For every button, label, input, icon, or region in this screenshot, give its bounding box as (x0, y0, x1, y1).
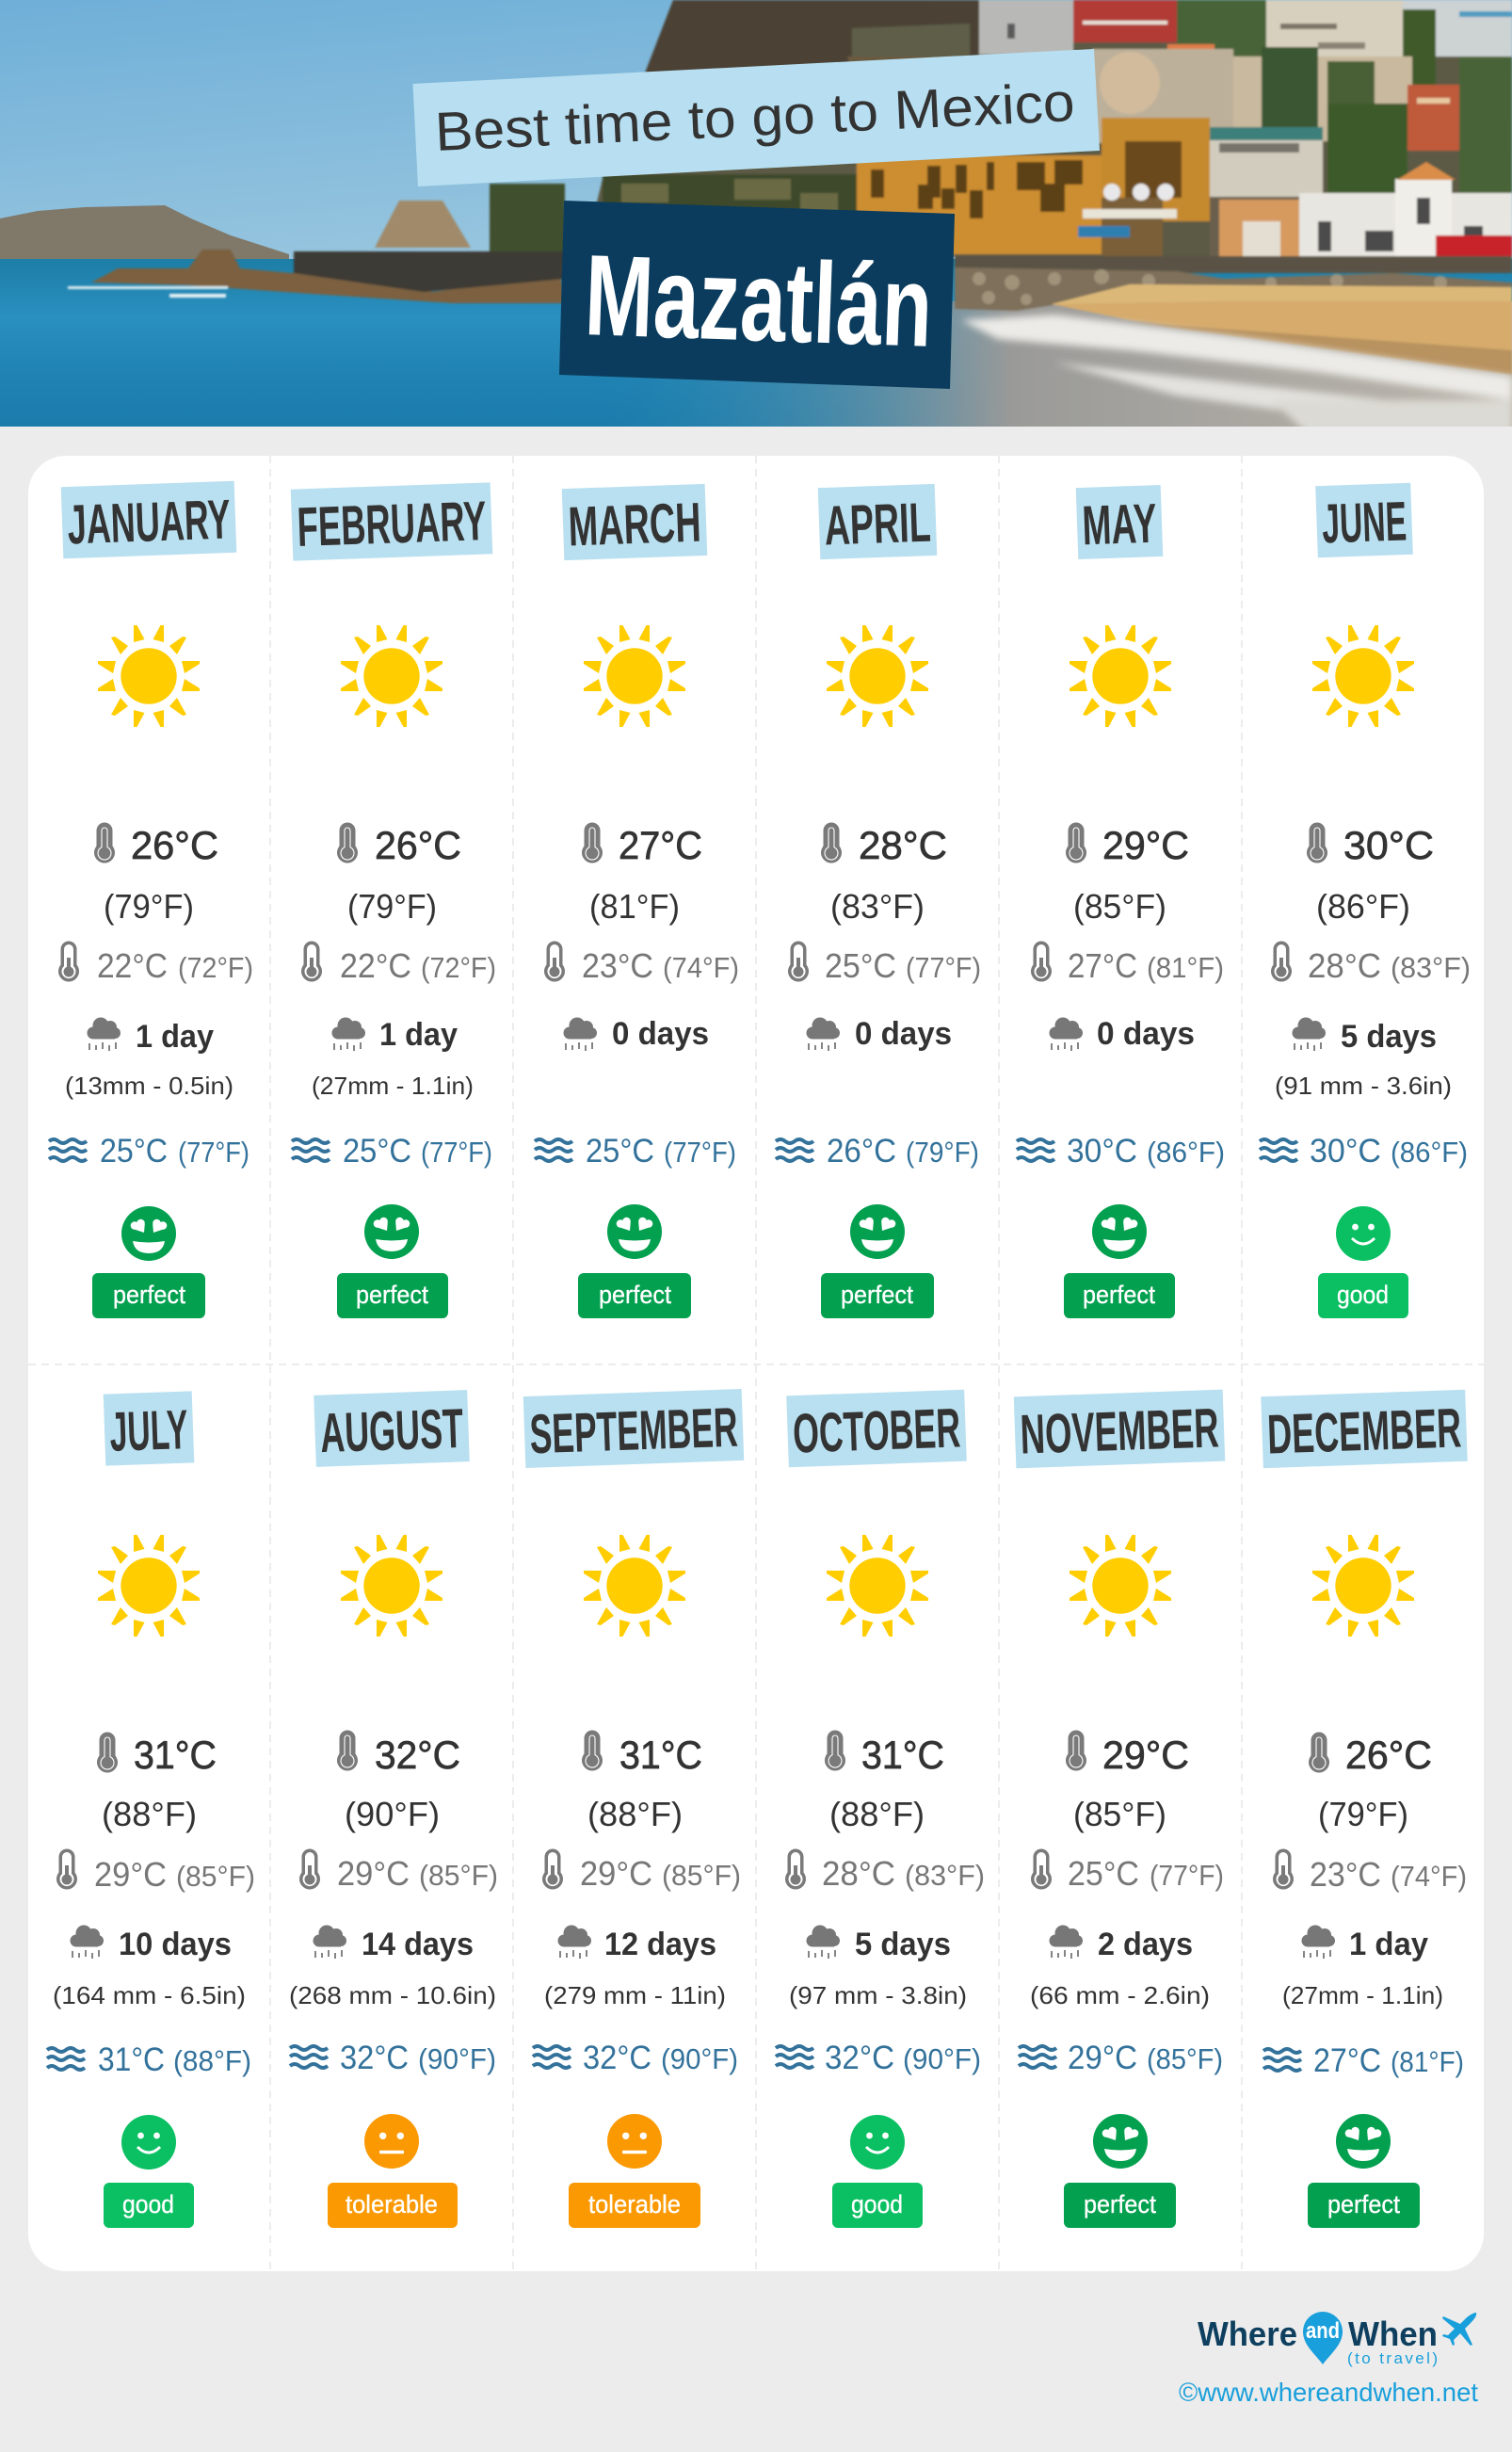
icon: airplane (1442, 2313, 1476, 2346)
sea temperature: (90°F) (418, 2042, 496, 2075)
sea temperature (776, 2040, 981, 2076)
icon: sun (827, 625, 928, 727)
rainfall (806, 1016, 952, 1052)
high temperature (582, 1731, 702, 1833)
low temperature: 28°C (822, 1854, 895, 1893)
low temperature (785, 1849, 985, 1893)
low temperature (1271, 942, 1471, 985)
rating: tolerable (569, 2114, 700, 2228)
icon: sun (1070, 625, 1171, 727)
icon: sun (584, 1535, 685, 1637)
rating: tolerable (328, 2114, 458, 2228)
low temperature (544, 942, 739, 985)
banner subtitle strip: Best time to go to Mexico (434, 72, 1076, 163)
sea temperature: (86°F) (1391, 1136, 1468, 1169)
sea temperature: 29°C (1068, 2040, 1137, 2076)
high temperature: (79°F) (1318, 1795, 1408, 1833)
rainfall: (279 mm - 11in) (544, 1981, 726, 2009)
sea temperature: (90°F) (661, 2042, 738, 2075)
rainfall (1282, 1925, 1443, 2009)
panel: August (289, 1390, 498, 2228)
sea temperature: 26°C (827, 1133, 896, 1170)
high temperature: 26°C (375, 823, 461, 867)
high temperature: 30°C (1343, 823, 1434, 867)
panel: April (776, 484, 981, 1318)
high temperature: 32°C (375, 1733, 460, 1777)
icon: sun (341, 1535, 442, 1637)
low temperature: (83°F) (905, 1859, 985, 1892)
high temperature: (86°F) (1316, 887, 1410, 926)
month heading: FEBRUARY (296, 490, 488, 558)
high temperature: 26°C (131, 823, 218, 867)
low temperature: 29°C (94, 1855, 167, 1894)
sea temperature: 32°C (825, 2040, 894, 2076)
high temperature (97, 1733, 217, 1833)
rating: perfect (337, 1204, 448, 1318)
panel: monthly weather card (28, 456, 1484, 2271)
rating: tolerable: tolerable (588, 2190, 681, 2218)
rainfall (563, 1016, 709, 1052)
rainfall (789, 1925, 967, 2009)
month heading: JULY (108, 1398, 189, 1463)
rating: good (832, 2115, 923, 2228)
high temperature: 29°C (1102, 823, 1189, 867)
rainfall: 1 day (136, 1019, 214, 1055)
low temperature (299, 1849, 498, 1893)
low temperature (58, 942, 253, 985)
sea temperature (533, 2040, 738, 2076)
rainfall: (13mm - 0.5in) (65, 1072, 233, 1100)
sea temperature (1017, 1133, 1225, 1170)
low temperature (1273, 1849, 1467, 1894)
rainfall: 5 days (1341, 1019, 1437, 1055)
sea temperature: (77°F) (178, 1136, 249, 1169)
rainfall (53, 1925, 246, 2009)
low temperature: (77°F) (1150, 1859, 1224, 1892)
rainfall: (91 mm - 3.6in) (1275, 1072, 1452, 1100)
low temperature: (77°F) (906, 951, 981, 984)
sea temperature: 25°C (586, 1133, 654, 1170)
rating: perfect (1064, 2114, 1176, 2228)
sea temperature: 31°C (98, 2041, 165, 2078)
sea temperature (49, 1133, 249, 1170)
panel: November (1014, 1390, 1225, 2228)
high temperature: 28°C (859, 823, 947, 867)
high temperature: 31°C (134, 1733, 217, 1777)
panel: June (1260, 483, 1471, 1318)
month heading (786, 1390, 967, 1467)
month heading (314, 1390, 470, 1467)
low temperature: 28°C (1308, 946, 1381, 985)
high temperature: 31°C (861, 1733, 944, 1777)
rainfall (1030, 1925, 1210, 2009)
icon: map pin (1303, 2312, 1343, 2364)
rainfall: 5 days (855, 1927, 951, 1962)
sea temperature (47, 2041, 251, 2078)
rating: perfect: perfect (113, 1281, 185, 1309)
rainfall (65, 1017, 233, 1100)
panel: December (1261, 1390, 1468, 2228)
low temperature (788, 942, 981, 985)
high temperature: (88°F) (587, 1795, 683, 1833)
icon: sun (827, 1535, 928, 1637)
rating: good: good (122, 2190, 174, 2218)
panel: May (1017, 485, 1225, 1318)
low temperature (542, 1849, 741, 1893)
rating: tolerable: tolerable (346, 2190, 438, 2218)
sea temperature (776, 1133, 979, 1170)
panel: July (47, 1391, 255, 2228)
month heading: JUNE (1321, 490, 1407, 556)
rainfall: 1 day (1349, 1927, 1428, 1962)
low temperature: 27°C (1068, 946, 1137, 985)
sea temperature: 30°C (1310, 1133, 1381, 1170)
month heading (818, 484, 937, 559)
rainfall: 14 days (362, 1927, 474, 1962)
icon: sun (1312, 1535, 1414, 1637)
rainfall (544, 1925, 726, 2009)
banner subtitle strip (412, 49, 1100, 186)
rainfall: 0 days (612, 1016, 709, 1052)
sea temperature: (81°F) (1391, 2045, 1464, 2078)
month heading (1315, 483, 1413, 557)
rating: perfect (1308, 2114, 1420, 2228)
month heading (1014, 1390, 1225, 1468)
icon: sun (341, 625, 442, 727)
low temperature: (85°F) (419, 1859, 498, 1892)
rainfall (1275, 1017, 1452, 1100)
rainfall: (97 mm - 3.8in) (789, 1981, 967, 2009)
rainfall: 12 days (604, 1927, 716, 1962)
high temperature: (88°F) (102, 1795, 197, 1833)
month heading (562, 484, 707, 560)
sea temperature: 27°C (1313, 2042, 1381, 2079)
icon: sun (1312, 625, 1414, 727)
month heading: SEPTEMBER (529, 1396, 739, 1465)
low temperature: (74°F) (1391, 1860, 1467, 1893)
rainfall (312, 1017, 474, 1100)
sea temperature: 25°C (100, 1133, 168, 1170)
high temperature: (83°F) (830, 887, 925, 926)
rating: perfect: perfect (356, 1281, 428, 1309)
sea temperature (1263, 2042, 1464, 2079)
high temperature (1307, 823, 1434, 926)
low temperature: (85°F) (176, 1860, 255, 1893)
rating: perfect (821, 1204, 934, 1318)
rating: perfect (1064, 1204, 1175, 1318)
month heading (1076, 485, 1163, 559)
logo: Where and When: and (1306, 2318, 1340, 2344)
rating: good (1318, 1206, 1408, 1318)
low temperature: (74°F) (663, 951, 739, 984)
high temperature: 31°C (619, 1733, 702, 1777)
high temperature: (79°F) (347, 887, 437, 926)
rainfall: 0 days (1097, 1016, 1195, 1052)
month heading: MARCH (567, 492, 702, 557)
logo: Where and When (1198, 2312, 1476, 2367)
sea temperature (1019, 2040, 1223, 2076)
low temperature (301, 942, 496, 985)
high temperature (1309, 1733, 1432, 1833)
low temperature: (72°F) (421, 951, 496, 984)
low temperature: 22°C (340, 946, 411, 985)
month heading (61, 481, 236, 558)
high temperature: (79°F) (104, 887, 194, 926)
month heading: APRIL (823, 492, 932, 557)
month heading: MAY (1081, 492, 1158, 557)
icon: sun (98, 625, 200, 727)
low temperature: (85°F) (662, 1859, 741, 1892)
high temperature: (85°F) (1073, 887, 1166, 926)
low temperature: 29°C (580, 1854, 652, 1893)
logo: Where and When: When (1348, 2315, 1438, 2353)
low temperature: 22°C (97, 946, 168, 985)
sea temperature: 32°C (583, 2040, 651, 2076)
low temperature: 29°C (337, 1854, 410, 1893)
month heading: JANUARY (66, 488, 232, 556)
rainfall (1049, 1016, 1195, 1052)
panel: September (523, 1389, 744, 2228)
sea temperature: (79°F) (906, 1136, 979, 1169)
high temperature: 27°C (619, 823, 702, 867)
panel: October (776, 1390, 985, 2228)
logo: Where and When: (to travel) (1347, 2349, 1438, 2367)
rainfall: 1 day (379, 1017, 458, 1053)
sea temperature: (88°F) (173, 2044, 251, 2077)
rainfall: 0 days (855, 1016, 952, 1052)
month heading (104, 1391, 194, 1466)
rating: good: good (1337, 1281, 1389, 1309)
rating: good: good (851, 2190, 903, 2218)
sea temperature: 25°C (343, 1133, 411, 1170)
icon: sun (584, 625, 685, 727)
high temperature: 26°C (1345, 1733, 1432, 1777)
rainfall: (66 mm - 2.6in) (1030, 1981, 1210, 2009)
sea temperature: (90°F) (903, 2042, 981, 2075)
icon: sun (1070, 1535, 1171, 1637)
low temperature: 25°C (825, 946, 896, 985)
low temperature: 23°C (1310, 1855, 1381, 1894)
rating: good (104, 2115, 194, 2228)
high temperature (825, 1731, 944, 1833)
high temperature: (85°F) (1073, 1795, 1166, 1833)
sea temperature (1260, 1133, 1468, 1170)
high temperature: 29°C (1102, 1733, 1189, 1777)
panel: March (535, 484, 739, 1318)
sea temperature: 30°C (1067, 1133, 1137, 1170)
month heading (523, 1389, 744, 1468)
rating: perfect: perfect (599, 1281, 671, 1309)
low temperature: (81°F) (1147, 951, 1224, 984)
low temperature (56, 1849, 255, 1894)
month heading (291, 482, 492, 561)
high temperature (582, 823, 702, 926)
rating: perfect (578, 1204, 691, 1318)
rainfall: 10 days (119, 1927, 232, 1962)
sea temperature: (85°F) (1147, 2042, 1223, 2075)
high temperature: (88°F) (829, 1795, 925, 1833)
rating: perfect: perfect (1083, 1281, 1155, 1309)
website credit: ©www.whereandwhen.net (1179, 2378, 1478, 2407)
high temperature (337, 1731, 460, 1833)
rating: perfect: perfect (1327, 2190, 1400, 2218)
low temperature (1031, 942, 1224, 985)
banner title strip (559, 201, 955, 389)
month heading: OCTOBER (792, 1396, 961, 1465)
rainfall: (164 mm - 6.5in) (53, 1981, 246, 2009)
high temperature (1066, 823, 1189, 926)
sea temperature: (86°F) (1147, 1136, 1225, 1169)
panel: February (291, 482, 496, 1318)
high temperature (94, 823, 218, 926)
rating: perfect: perfect (841, 1281, 913, 1309)
sea temperature (535, 1133, 736, 1170)
month heading: NOVEMBER (1019, 1396, 1220, 1466)
low temperature: (72°F) (178, 951, 253, 984)
rating: perfect (92, 1206, 205, 1318)
rainfall (289, 1925, 496, 2009)
sea temperature: (77°F) (664, 1136, 736, 1169)
rainfall: (27mm - 1.1in) (1282, 1981, 1443, 2009)
rainfall: 2 days (1098, 1927, 1193, 1962)
rainfall: (268 mm - 10.6in) (289, 1981, 496, 2009)
low temperature: (83°F) (1391, 951, 1471, 984)
panel: January (49, 481, 253, 1318)
logo: Where and When: Where (1198, 2315, 1297, 2353)
rainfall: (27mm - 1.1in) (312, 1072, 474, 1100)
banner title strip: Mazatlán (583, 231, 935, 371)
icon: sun (98, 1535, 200, 1637)
low temperature: 25°C (1068, 1854, 1139, 1893)
month heading: AUGUST (319, 1397, 464, 1464)
high temperature (1066, 1731, 1189, 1833)
sea temperature (290, 2040, 496, 2076)
sea temperature: 32°C (340, 2040, 409, 2076)
high temperature: (90°F) (345, 1795, 440, 1833)
high temperature: (81°F) (589, 887, 680, 926)
high temperature (337, 823, 461, 926)
low temperature (1031, 1849, 1224, 1893)
sea temperature (292, 1133, 492, 1170)
sea temperature: (77°F) (421, 1136, 492, 1169)
high temperature (821, 823, 947, 926)
rating: perfect: perfect (1084, 2190, 1156, 2218)
low temperature: 23°C (582, 946, 653, 985)
banner photo: Mazatlán coast (0, 0, 1512, 443)
